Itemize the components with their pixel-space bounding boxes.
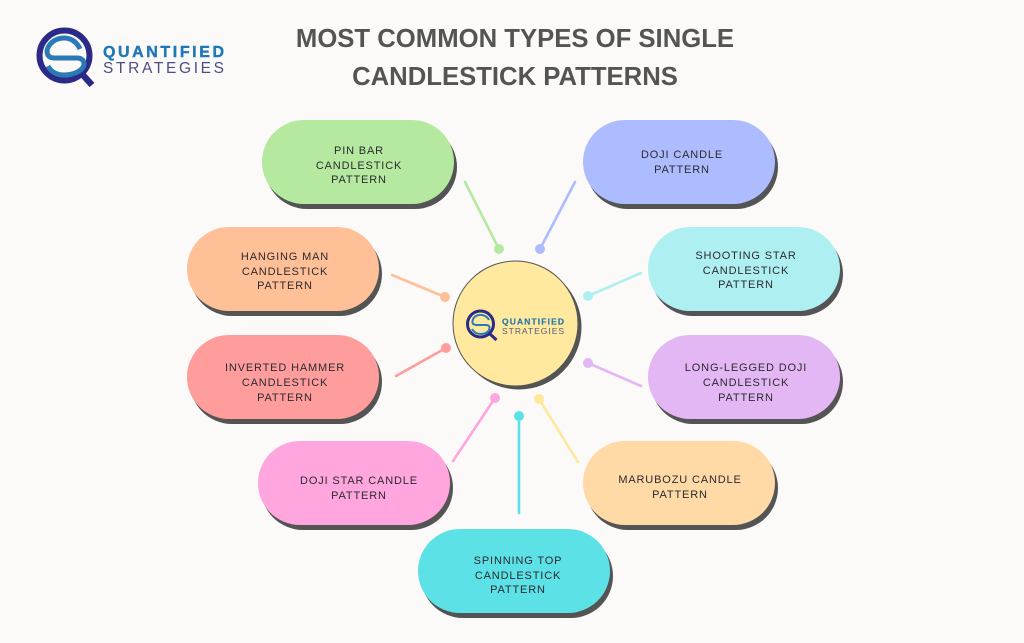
- panel: doji star: [258, 441, 450, 525]
- panel: marubozu: PATTERN: [652, 488, 708, 500]
- panel: spinning top: PATTERN: [490, 584, 546, 596]
- panel: shooting star: [648, 227, 840, 311]
- center logo: [468, 311, 564, 340]
- panel: shooting star: SHOOTING STAR: [695, 250, 797, 262]
- panel: spinning top: CANDLESTICK: [475, 570, 561, 582]
- panel: long-legged doji: PATTERN: [718, 392, 774, 404]
- connector: long-legged doji: [583, 358, 641, 386]
- panel: marubozu: [583, 441, 775, 525]
- center logo: STRATEGIES: [502, 326, 564, 336]
- panel: shooting star: PATTERN: [718, 279, 774, 291]
- connector: inverted hammer: [396, 343, 451, 376]
- connector: pin bar: [465, 182, 504, 254]
- connector: doji star: [453, 393, 500, 461]
- panel: doji star: DOJI STAR CANDLE: [300, 475, 418, 487]
- connector: marubozu: [534, 394, 578, 462]
- center logo: QUANTIFIED: [502, 316, 564, 326]
- panel: pin bar: PIN BAR: [334, 145, 384, 157]
- panel: long-legged doji: [648, 335, 840, 419]
- connector: doji: [535, 182, 575, 254]
- panel: inverted hammer: INVERTED HAMMER: [225, 362, 345, 374]
- panel: shooting star: CANDLESTICK: [703, 265, 789, 277]
- panel: spinning top: [418, 529, 610, 613]
- panel: inverted hammer: [187, 335, 379, 419]
- panel: long-legged doji: CANDLESTICK: [703, 377, 789, 389]
- title: [296, 25, 734, 91]
- connector: shooting star: [583, 273, 641, 301]
- panel: doji candle: DOJI CANDLE: [641, 149, 723, 161]
- panel: inverted hammer: CANDLESTICK: [242, 377, 328, 389]
- panel: spinning top: SPINNING TOP: [474, 555, 562, 567]
- logo: Quantified Strategies: QUANTIFIED: [103, 44, 224, 61]
- connector: spinning top: [514, 411, 524, 513]
- panel: long-legged doji: LONG-LEGGED DOJI: [685, 362, 807, 374]
- panel: marubozu: MARUBOZU CANDLE: [618, 474, 742, 486]
- panel: hanging man: CANDLESTICK: [242, 266, 328, 278]
- panel: pin bar: [262, 120, 454, 204]
- panel: hanging man: [187, 227, 379, 311]
- logo: Quantified Strategies: [36, 28, 224, 88]
- logo: Quantified Strategies: STRATEGIES: [103, 60, 224, 77]
- panel: hanging man: PATTERN: [257, 280, 313, 292]
- panel: doji star: PATTERN: [331, 490, 387, 502]
- panel: inverted hammer: PATTERN: [257, 392, 313, 404]
- panel: doji candle: PATTERN: [654, 164, 710, 176]
- panel: pin bar: CANDLESTICK: [316, 160, 402, 172]
- title: MOST COMMON TYPES OF SINGLE: [296, 25, 734, 53]
- panel: hanging man: HANGING MAN: [241, 251, 329, 263]
- title: CANDLESTICK PATTERNS: [352, 63, 678, 91]
- connector: hanging man: [392, 275, 450, 302]
- panel: pin bar: PATTERN: [331, 174, 387, 186]
- panel: doji candle: [583, 120, 775, 204]
